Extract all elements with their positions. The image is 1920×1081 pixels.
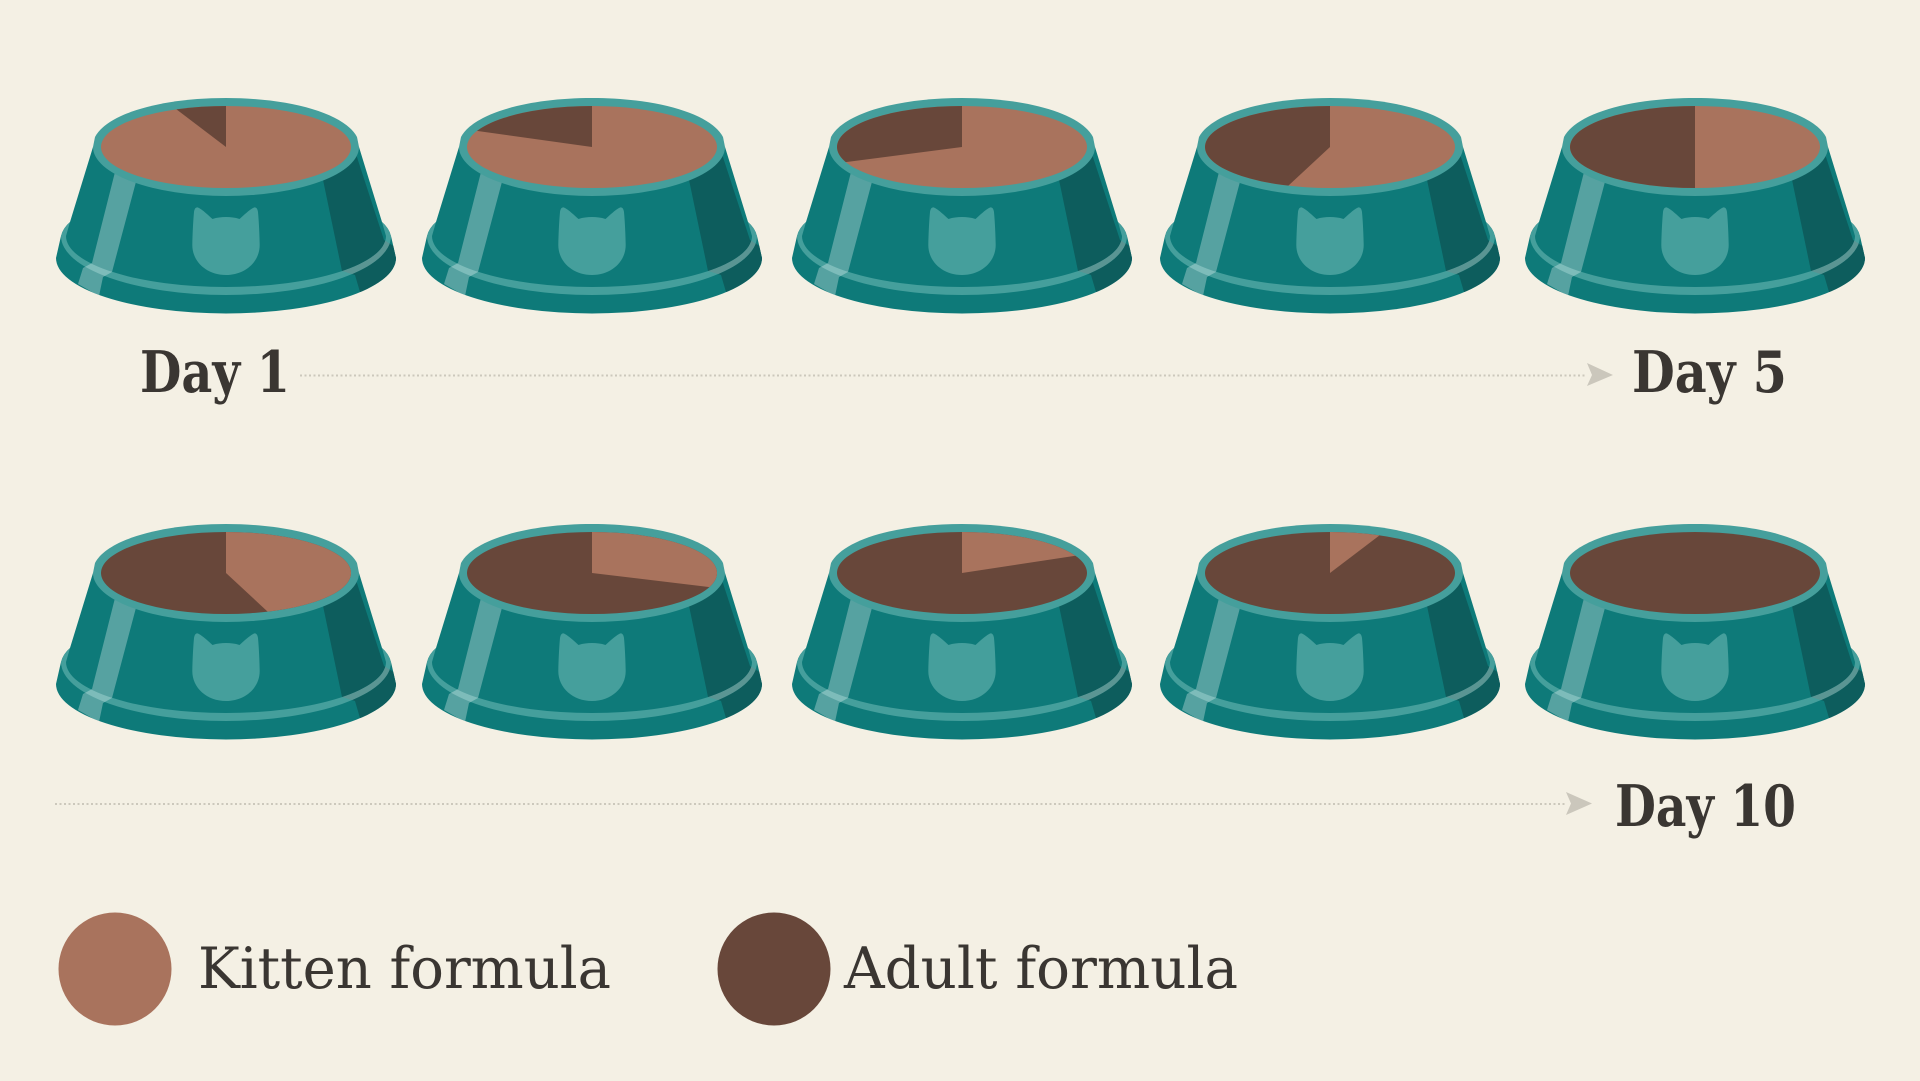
bowl: day 4 [1160,98,1500,314]
food: half and half [1570,106,1820,188]
legend swatch: adult [718,912,830,1026]
label: day 10: Day 10 [1615,773,1796,840]
legend text: adult: Adult formula [843,936,1238,1002]
bowl: day 10 [1525,524,1869,740]
food: mostly kitten formula [101,106,351,188]
bowl: day 3 [792,98,1132,314]
food: day 4 mix [1205,106,1455,188]
legend text: kitten: Kitten formula [198,936,611,1002]
food: day 2 mix [467,106,717,188]
legend: adult formula [718,912,1238,1026]
bowl: day 6 [56,524,396,740]
food: day 6 mix [101,532,351,614]
label: day 1: Day 1 [140,339,290,406]
food: day 9 mix [1205,532,1455,614]
bowl: day 5 [1525,98,1865,314]
food: day 3 mix [837,106,1087,188]
food: day 7 mix [467,532,717,614]
legend: kitten formula [58,912,611,1026]
bowl: day 8 [792,524,1132,740]
bowl: day 1 [56,98,396,314]
bowl: day 2 [422,98,762,314]
food: all adult formula [1570,532,1820,614]
food: day 8 mix [837,532,1087,614]
timeline arrow: to day 10 [55,792,1592,815]
timeline arrow: day 1 to day 5 [300,363,1613,386]
bowl: day 7 [422,524,762,740]
label: day 5: Day 5 [1632,339,1787,406]
legend swatch: kitten [58,912,172,1026]
bowl: day 9 [1160,524,1500,740]
